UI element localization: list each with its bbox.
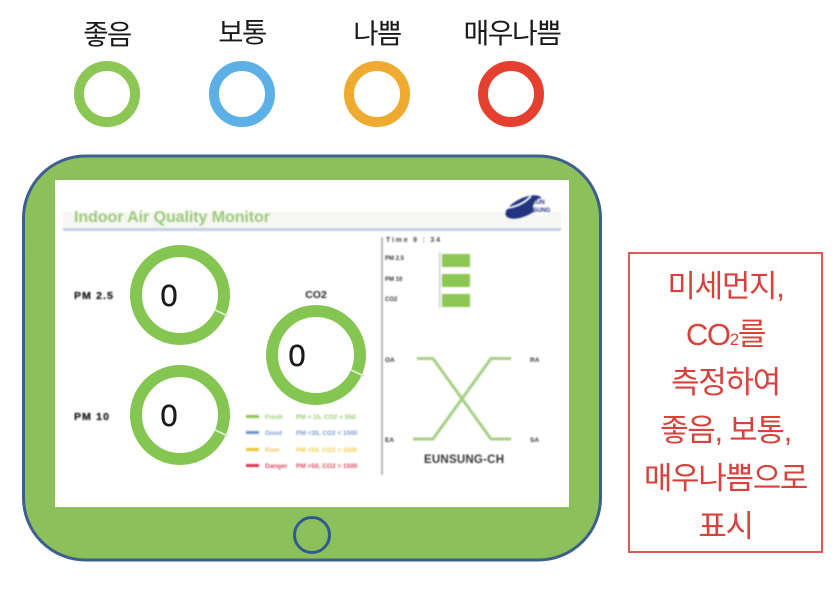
label: PM 10: PM 10 [74,411,109,423]
legend item: normal: 보통 [218,17,266,48]
channel crossover diagram [385,357,540,466]
legend item: very bad [463,18,561,122]
channel crossover diagram: SA [530,437,539,444]
status legend table [246,414,358,470]
status legend table: Fresh [265,414,283,421]
channel crossover diagram: RA [530,357,540,364]
gauge: PM 2.5: 0 [160,278,178,313]
status legend table: PM <35, CO2 < 1000 [296,430,358,437]
channel crossover diagram: OA [385,357,395,364]
legend item: bad [349,18,405,122]
callout: description: 미세먼지, [667,269,784,304]
status legend table: PM <50, CO2 < 1500 [296,447,358,454]
callout: description: CO2를 [686,317,765,352]
status bars: PM 2.5 [385,256,405,262]
time readout: Time 9 : 34 [386,237,440,244]
channel crossover diagram: EA [385,437,394,444]
icon: company logo [502,190,551,224]
tablet device [24,156,600,560]
legend item: bad: 나쁨 [353,18,401,49]
status legend table: PM >50, CO2 > 1500 [296,463,358,470]
status legend table: Danger [265,463,288,470]
callout: description: 측정하여 [671,365,780,400]
status bars: PM 10 [385,277,403,283]
status legend table: Poor [265,447,280,454]
legend item: very bad: 매우나쁨 [463,18,561,49]
screen title: Indoor Air Quality Monitor [74,209,270,226]
gauge: CO2 [272,311,364,399]
icon: company logo: EUN [532,200,545,206]
icon: company logo: SUNG [533,208,551,214]
channel crossover diagram: EUNSUNG-CH [424,454,504,466]
legend item: good: 좋음 [83,19,131,50]
status legend table: PM < 15, CO2 < 550 [296,414,356,421]
callout: description: 표시 [698,509,753,544]
status legend table: Good [265,430,282,437]
label: CO2: CO2 [305,289,327,301]
legend: air quality levels [79,17,561,122]
label: PM 2.5: PM 2.5 [74,290,113,302]
icon: home button [294,518,330,552]
gauge: CO2: 0 [288,338,306,373]
legend item: good [79,19,135,122]
status bars [385,252,470,308]
gauge: PM 10: 0 [160,398,178,433]
callout: description: 좋음, 보통, [660,413,791,448]
legend item: normal [214,17,270,122]
gauge: PM 10 [136,371,228,459]
status bars: CO2 [385,297,398,303]
monitor screen [55,180,569,507]
callout: description: 매우나쁨으로 [644,461,807,496]
callout: description [628,252,823,553]
gauge: PM 2.5 [136,251,228,339]
